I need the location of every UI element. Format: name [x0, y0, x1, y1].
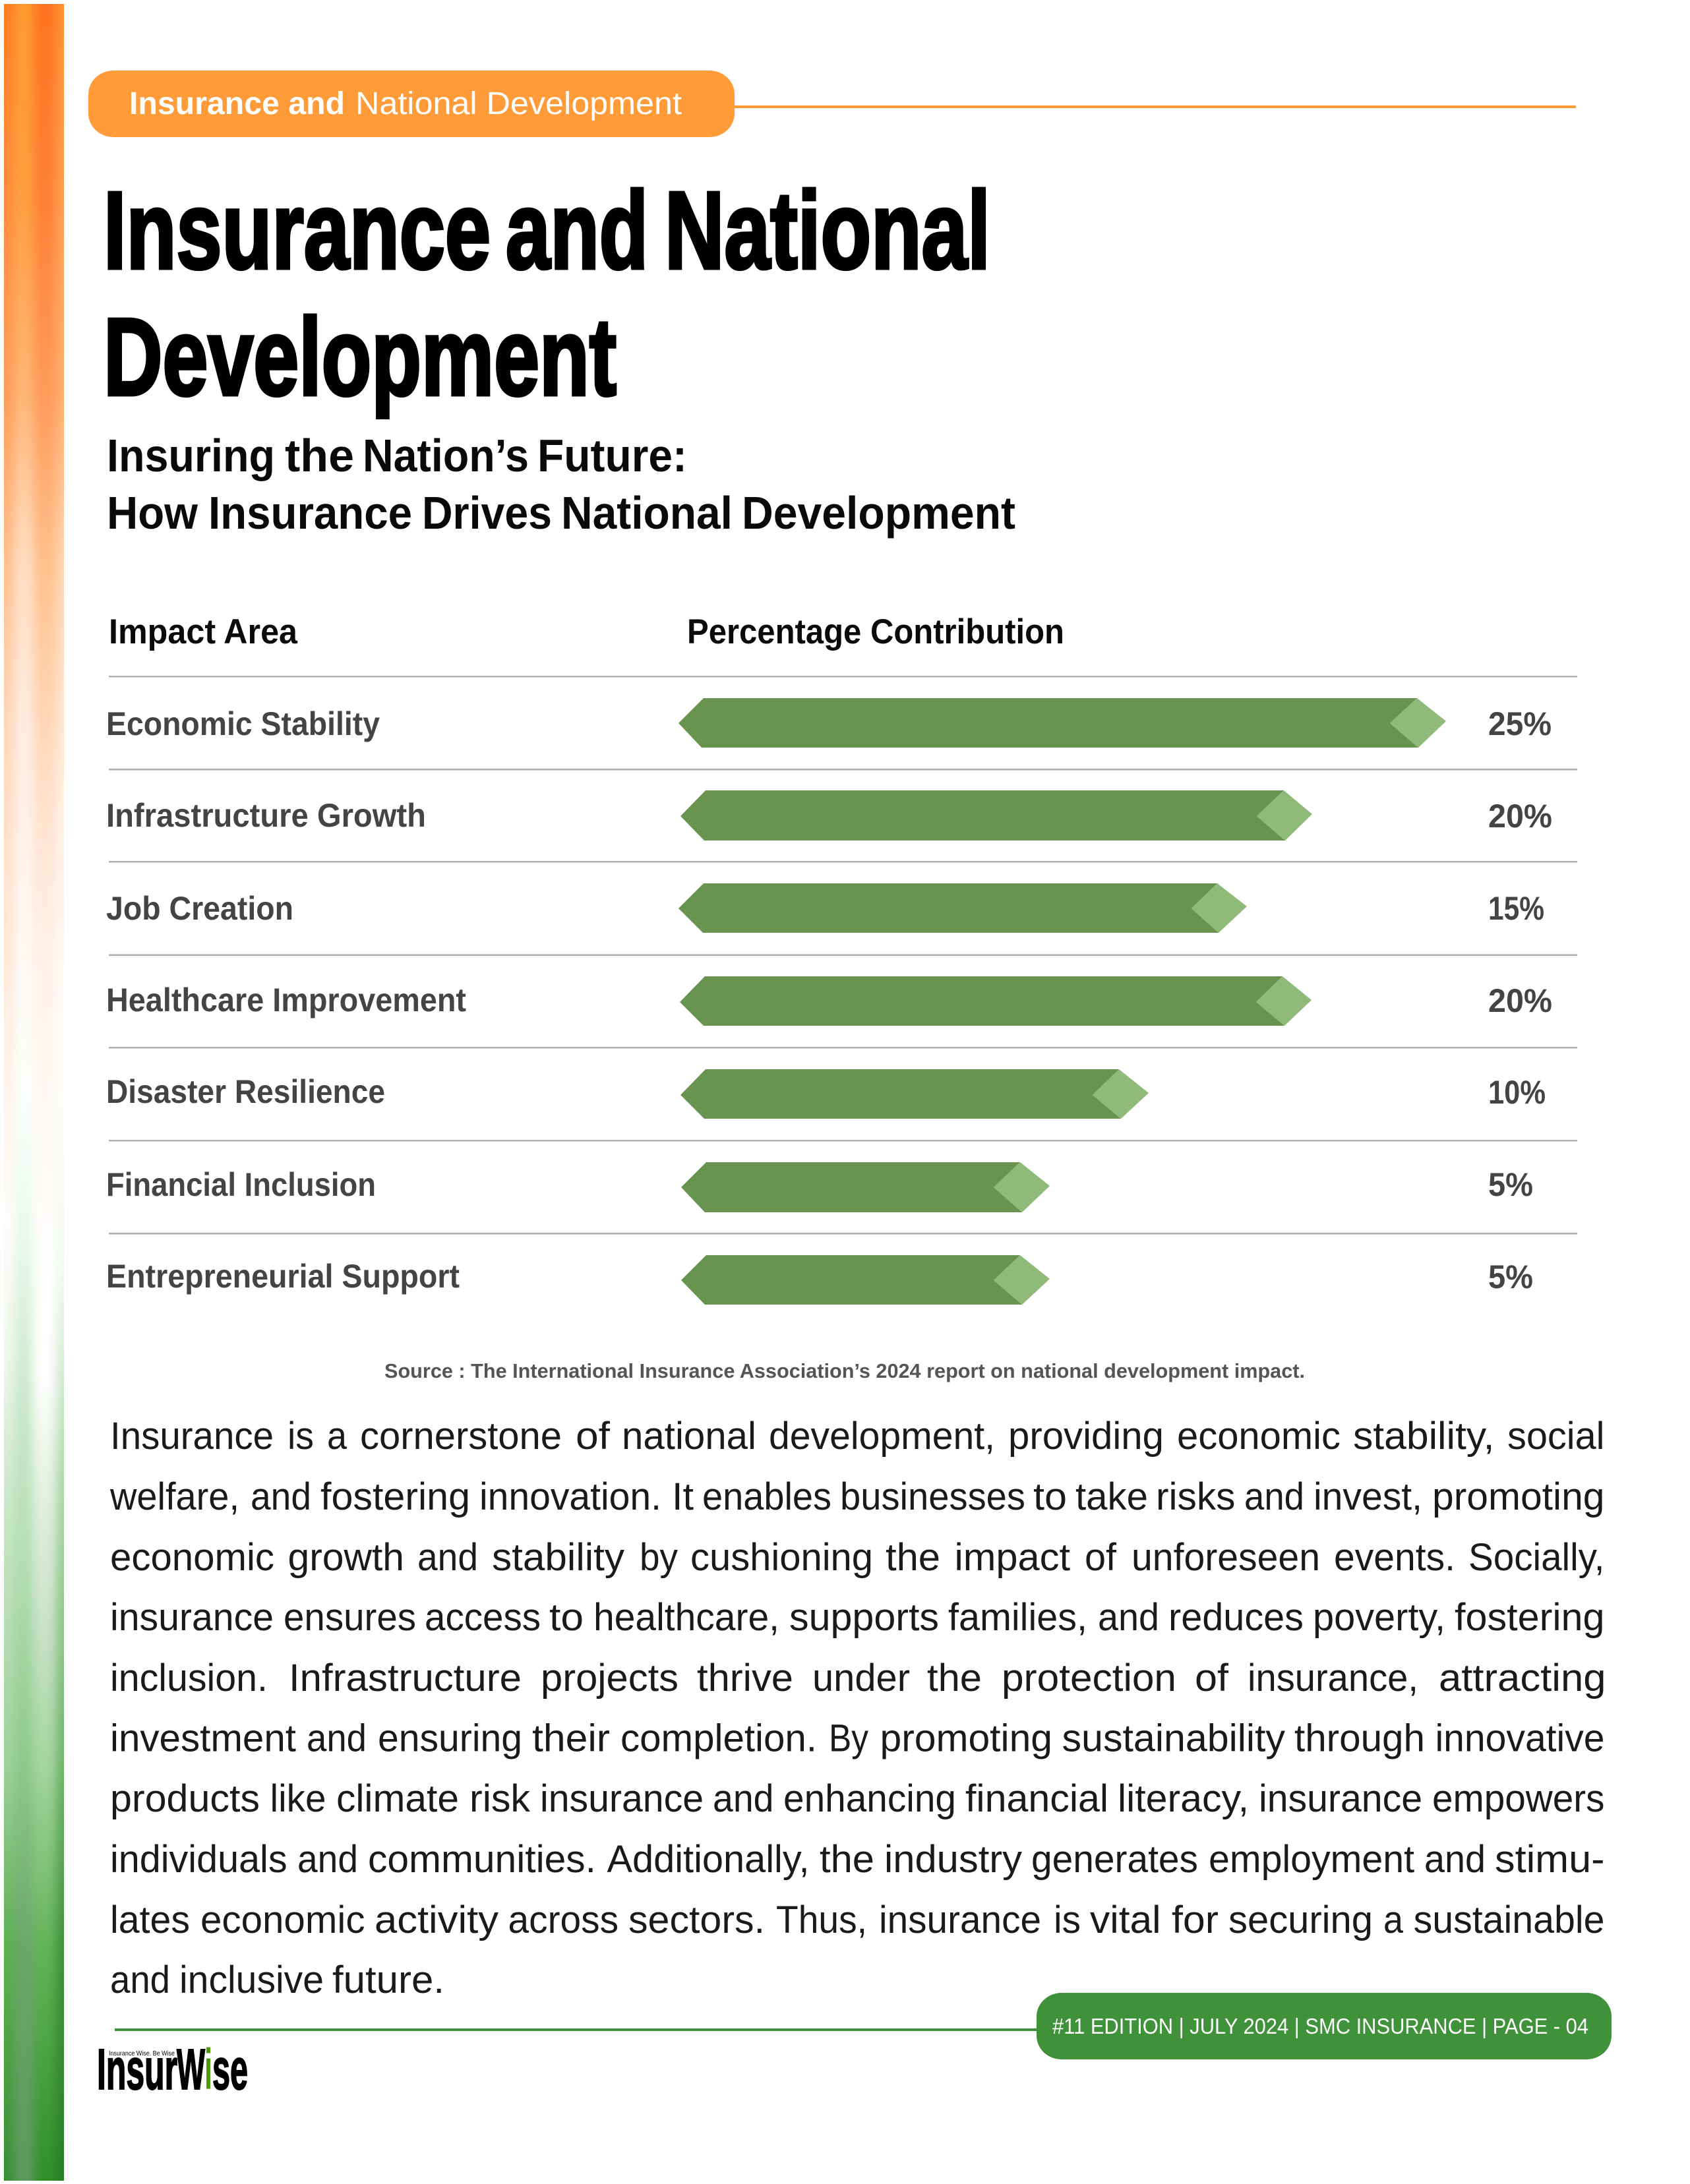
- logo: InsurWise: se: [212, 2038, 248, 2102]
- body paragraph: is: [1054, 1899, 1081, 1941]
- body paragraph: and: [713, 1777, 774, 1820]
- subtitle: the: [285, 430, 354, 481]
- row: disaster resilience 10%: 10%: [1488, 1074, 1546, 1111]
- body paragraph: and: [417, 1536, 478, 1579]
- title: National: [665, 169, 990, 292]
- body paragraph: promoting: [1432, 1475, 1605, 1518]
- body paragraph: economic: [1177, 1415, 1341, 1458]
- body paragraph: unforeseen: [1132, 1536, 1320, 1579]
- body paragraph: healthcare,: [593, 1596, 779, 1639]
- row: disaster resilience 10%: Disaster Resilience: [106, 1073, 385, 1110]
- body paragraph: the: [927, 1657, 982, 1699]
- body paragraph: climate: [336, 1777, 459, 1820]
- body paragraph: families,: [948, 1596, 1087, 1639]
- body paragraph: under: [812, 1657, 910, 1699]
- body paragraph: to: [549, 1596, 584, 1639]
- body paragraph: their: [532, 1717, 610, 1760]
- table: percentage contribution by impact area: [106, 612, 1577, 1305]
- row: entrepreneurial support 5%: 5%: [1488, 1258, 1533, 1295]
- body paragraph: and: [1098, 1596, 1159, 1639]
- body paragraph: events.: [1334, 1536, 1455, 1579]
- logo: InsurWise: i: [204, 2038, 212, 2102]
- body paragraph: and: [307, 1717, 367, 1760]
- body paragraph: economic: [200, 1899, 365, 1941]
- subtitle: [107, 430, 1015, 539]
- body paragraph: insurance,: [1248, 1657, 1418, 1699]
- body paragraph: individuals: [110, 1838, 287, 1881]
- subtitle: Insurance: [208, 487, 412, 539]
- table header: impact area: Impact Area: [109, 612, 297, 651]
- body paragraph: a: [327, 1415, 347, 1458]
- body paragraph: national: [622, 1415, 756, 1458]
- body paragraph: fostering: [1455, 1596, 1605, 1639]
- body paragraph: of: [1085, 1536, 1117, 1579]
- body paragraph: to: [1033, 1475, 1067, 1518]
- body paragraph: through: [1294, 1717, 1425, 1760]
- body paragraph: literacy,: [1118, 1777, 1249, 1820]
- body paragraph: insurance: [879, 1899, 1041, 1941]
- row: infrastructure growth 20%: [106, 790, 1552, 841]
- body paragraph: projects: [541, 1657, 679, 1699]
- body paragraph: a: [1383, 1899, 1404, 1941]
- body paragraph: reduces: [1168, 1596, 1304, 1639]
- body paragraph: empowers: [1432, 1777, 1605, 1820]
- header tag: section pill with rule: Insurance and: [129, 86, 345, 121]
- body paragraph: insurance: [540, 1777, 704, 1820]
- body paragraph: impact: [955, 1536, 1070, 1579]
- body paragraph: and: [110, 1959, 170, 2001]
- body paragraph: stability,: [1353, 1415, 1494, 1458]
- body paragraph: It: [672, 1475, 694, 1518]
- subtitle: National: [561, 487, 733, 539]
- body paragraph: generates: [1031, 1838, 1198, 1881]
- row: infrastructure growth 20%: Infrastructure Growth: [106, 797, 426, 834]
- body paragraph: activity: [375, 1899, 498, 1941]
- body paragraph: and: [251, 1475, 311, 1518]
- body paragraph: cushioning: [690, 1536, 873, 1579]
- body paragraph: financial: [965, 1777, 1108, 1820]
- body paragraph: businesses: [840, 1475, 1025, 1518]
- body paragraph: Thus,: [776, 1899, 867, 1941]
- body paragraph: the: [886, 1536, 940, 1579]
- row: entrepreneurial support 5%: Entrepreneurial Support: [106, 1258, 460, 1295]
- body paragraph: access: [425, 1596, 541, 1639]
- logo: InsurWise: Insurance Wise. Be Wise: [109, 2050, 175, 2057]
- body paragraph: protection: [1002, 1657, 1176, 1699]
- body paragraph: completion.: [620, 1717, 817, 1760]
- body paragraph: risk: [469, 1777, 531, 1820]
- subtitle: Future:: [537, 430, 687, 481]
- row: job creation 15%: Job Creation: [106, 890, 293, 927]
- body paragraph: by: [640, 1536, 678, 1579]
- body paragraph: of: [1195, 1657, 1229, 1699]
- table header: percentage contribution: Percentage Contribution: [687, 612, 1064, 651]
- body paragraph: industry: [884, 1838, 1022, 1881]
- subtitle: Insuring: [107, 430, 275, 481]
- subtitle: How: [107, 487, 198, 539]
- body paragraph: ensures: [284, 1596, 416, 1639]
- body paragraph: the: [820, 1838, 874, 1881]
- row: financial inclusion 5%: [106, 1162, 1533, 1212]
- body paragraph: thrive: [697, 1657, 793, 1699]
- body paragraph: vital: [1090, 1899, 1161, 1941]
- body paragraph: social: [1507, 1415, 1605, 1458]
- title: and: [506, 169, 648, 292]
- body paragraph: innovative: [1435, 1717, 1605, 1760]
- body paragraph: stimu-: [1495, 1838, 1605, 1881]
- footer: edition pill with rule: #11 EDITION | JULY 2024 | SMC INSURANCE | PAGE - 04: [1052, 2014, 1588, 2038]
- body paragraph: providing: [1008, 1415, 1164, 1458]
- body paragraph: promoting: [880, 1717, 1052, 1760]
- body paragraph: invest,: [1313, 1475, 1422, 1518]
- body paragraph: Insurance: [110, 1415, 274, 1458]
- body paragraph: and: [297, 1838, 358, 1881]
- title: [104, 169, 990, 419]
- body paragraph: insurance: [1259, 1777, 1422, 1820]
- body paragraph: [109, 1415, 1606, 2001]
- body paragraph: By: [829, 1717, 868, 1760]
- body paragraph: welfare,: [109, 1475, 239, 1518]
- row: disaster resilience 10%: [106, 1069, 1546, 1119]
- body paragraph: sustainable: [1414, 1899, 1605, 1941]
- body paragraph: employment: [1209, 1838, 1414, 1881]
- title: Insurance: [104, 169, 491, 292]
- body paragraph: supports: [789, 1596, 939, 1639]
- body paragraph: Infrastructure: [289, 1657, 522, 1699]
- row: economic stability 25%: [106, 698, 1552, 748]
- header tag: section pill with rule: National Development: [355, 86, 682, 121]
- body paragraph: development,: [769, 1415, 995, 1458]
- body paragraph: take: [1075, 1475, 1148, 1518]
- body paragraph: Socially,: [1468, 1536, 1605, 1579]
- logo: InsurWise: Insur: [97, 2038, 177, 2102]
- body paragraph: sustainability: [1062, 1717, 1285, 1760]
- subtitle: Drives: [422, 487, 552, 539]
- row: financial inclusion 5%: Financial Inclusion: [106, 1166, 376, 1203]
- body paragraph: Additionally,: [607, 1838, 810, 1881]
- sidebar: orange white green gradient strip: [4, 4, 64, 2181]
- body paragraph: stability: [492, 1536, 624, 1579]
- body paragraph: insurance: [110, 1596, 274, 1639]
- row: healthcare improvement 20%: [106, 976, 1552, 1026]
- footer: edition pill with rule: [115, 1993, 1612, 2059]
- body paragraph: inclusion.: [110, 1657, 268, 1699]
- body paragraph: enables: [702, 1475, 831, 1518]
- row: infrastructure growth 20%: 20%: [1488, 798, 1552, 835]
- body paragraph: inclusive: [179, 1959, 324, 2001]
- body paragraph: and: [1424, 1838, 1486, 1881]
- body paragraph: innovation.: [479, 1475, 661, 1518]
- body paragraph: is: [287, 1415, 314, 1458]
- logo: InsurWise: W: [177, 2038, 205, 2102]
- body paragraph: future.: [332, 1959, 444, 2001]
- row: entrepreneurial support 5%: [106, 1255, 1533, 1305]
- body paragraph: investment: [110, 1717, 296, 1760]
- body paragraph: lates: [110, 1899, 190, 1941]
- body paragraph: communities.: [368, 1838, 596, 1881]
- subtitle: Development: [742, 487, 1015, 539]
- body paragraph: sectors.: [628, 1899, 765, 1941]
- body paragraph: fostering: [320, 1475, 470, 1518]
- body paragraph: economic: [110, 1536, 274, 1579]
- body paragraph: and: [1244, 1475, 1304, 1518]
- body paragraph: risks: [1156, 1475, 1236, 1518]
- body paragraph: products: [110, 1777, 260, 1820]
- body paragraph: poverty,: [1313, 1596, 1445, 1639]
- header tag: section pill with rule: [88, 71, 1576, 137]
- body paragraph: of: [576, 1415, 611, 1458]
- body paragraph: enhancing: [783, 1777, 956, 1820]
- row: financial inclusion 5%: 5%: [1488, 1166, 1533, 1203]
- body paragraph: across: [508, 1899, 619, 1941]
- row: healthcare improvement 20%: Healthcare Improvement: [106, 982, 466, 1018]
- title: Development: [104, 296, 617, 419]
- row: economic stability 25%: Economic Stability: [106, 705, 380, 742]
- body paragraph: attracting: [1439, 1657, 1606, 1699]
- row: healthcare improvement 20%: 20%: [1488, 982, 1552, 1019]
- row: job creation 15%: [106, 883, 1544, 933]
- row: job creation 15%: 15%: [1488, 890, 1544, 927]
- row: economic stability 25%: 25%: [1488, 705, 1552, 742]
- subtitle: Nation’s: [363, 430, 529, 481]
- body paragraph: growth: [287, 1536, 404, 1579]
- source note: Source : The International Insurance Association’s 2024 report on national development impact.: [384, 1359, 1305, 1382]
- body paragraph: ensuring: [378, 1717, 522, 1760]
- body paragraph: like: [270, 1777, 326, 1820]
- body paragraph: for: [1172, 1899, 1219, 1941]
- body paragraph: cornerstone: [360, 1415, 562, 1458]
- body paragraph: securing: [1228, 1899, 1373, 1941]
